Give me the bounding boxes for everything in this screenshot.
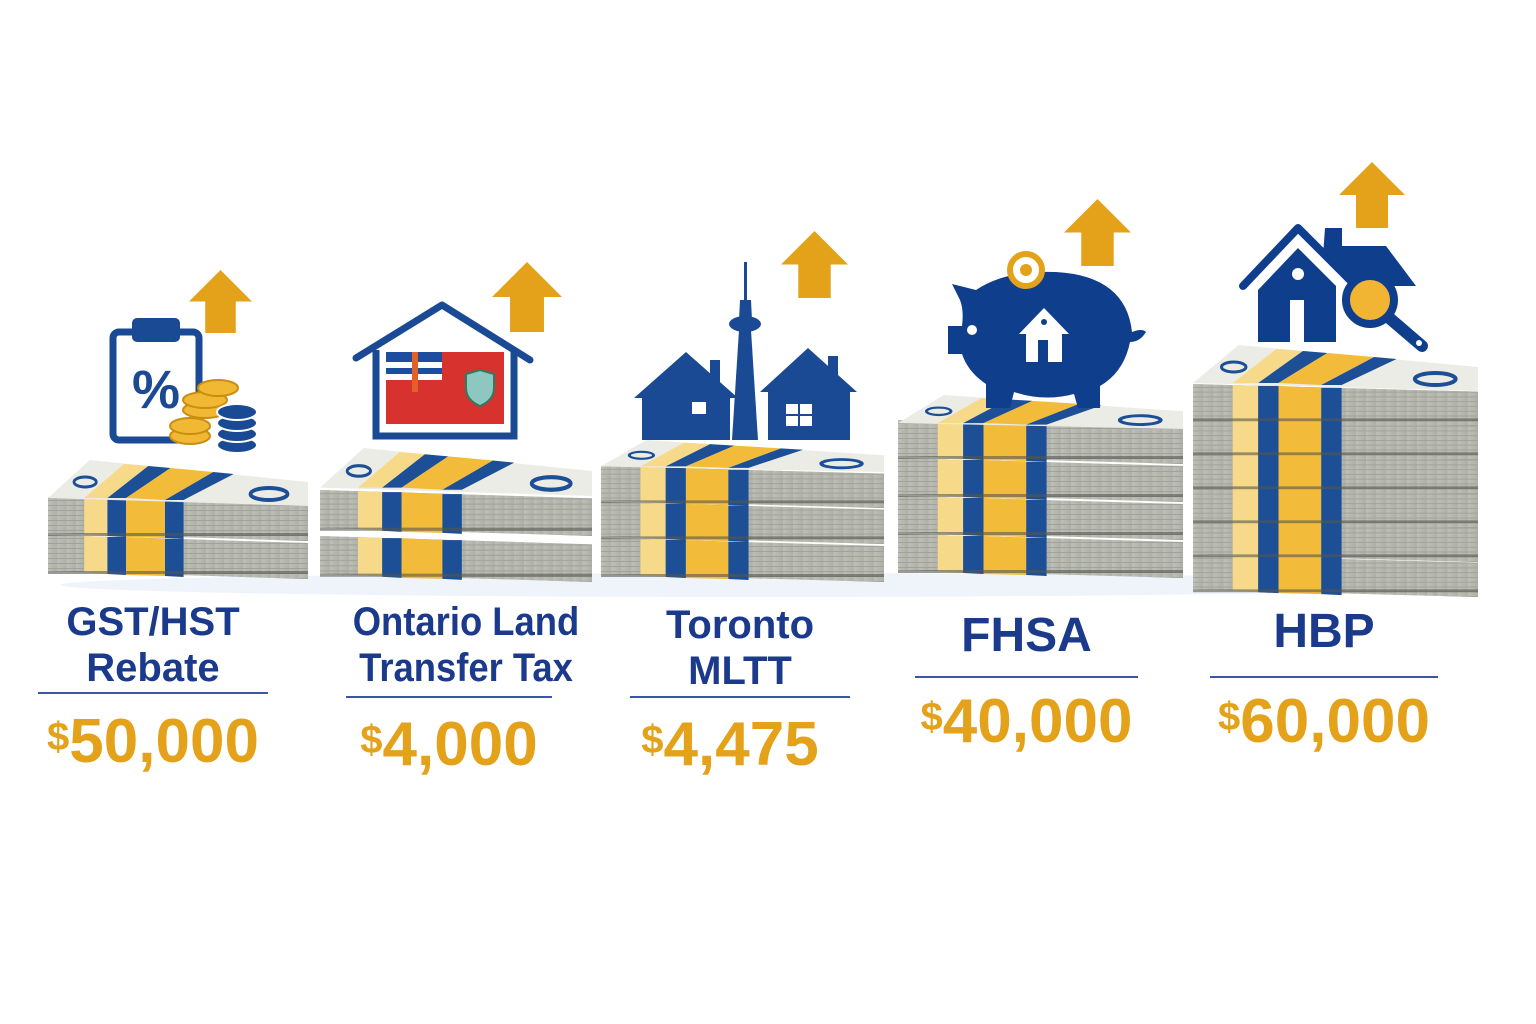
stack 1: GST/HST <box>48 460 308 579</box>
arrow 5 <box>1339 162 1405 228</box>
arrow 1 <box>189 270 252 333</box>
value: $50,000: $50,000 <box>47 707 259 776</box>
value: $4,475: $4,475 <box>641 710 819 779</box>
value: $4,000: $4,000 <box>360 710 538 779</box>
icon: clipboard with coins <box>113 318 257 453</box>
icon: house with Ontario flag <box>356 305 530 436</box>
title: GST/HST Rebate: GST/HST <box>66 600 240 644</box>
stack 2: Ontario LTT <box>320 448 592 582</box>
value: $60,000: $60,000 <box>1218 687 1430 756</box>
title: Toronto MLTT: MLTT <box>688 649 792 693</box>
stack 5: HBP <box>1193 345 1478 597</box>
title: Toronto MLTT <box>666 603 814 693</box>
arrow 4 <box>1064 199 1131 266</box>
title: Toronto MLTT: Toronto <box>666 603 814 647</box>
title: FHSA: FHSA <box>961 609 1092 662</box>
icon: house with magnifier <box>1243 228 1422 346</box>
title: HBP: HBP <box>1273 605 1375 658</box>
icon: Toronto skyline <box>634 262 857 440</box>
title: GST/HST Rebate <box>66 600 240 690</box>
arrow 3 <box>781 231 848 298</box>
stack 3: Toronto MLTT <box>601 440 884 582</box>
title: GST/HST Rebate: Rebate <box>86 646 220 690</box>
title: Ontario Land Transfer Tax: Ontario Land <box>353 600 579 644</box>
icon: piggy bank with house <box>948 254 1146 408</box>
title: Ontario Land Transfer Tax <box>353 600 579 690</box>
arrow 2 <box>492 262 562 332</box>
icon: clipboard with coins: % <box>132 360 180 420</box>
title: Ontario Land Transfer Tax: Transfer Tax <box>359 646 573 690</box>
stack 4: FHSA <box>898 395 1183 578</box>
value: $40,000: $40,000 <box>921 687 1132 756</box>
shadow floor <box>60 573 1460 597</box>
